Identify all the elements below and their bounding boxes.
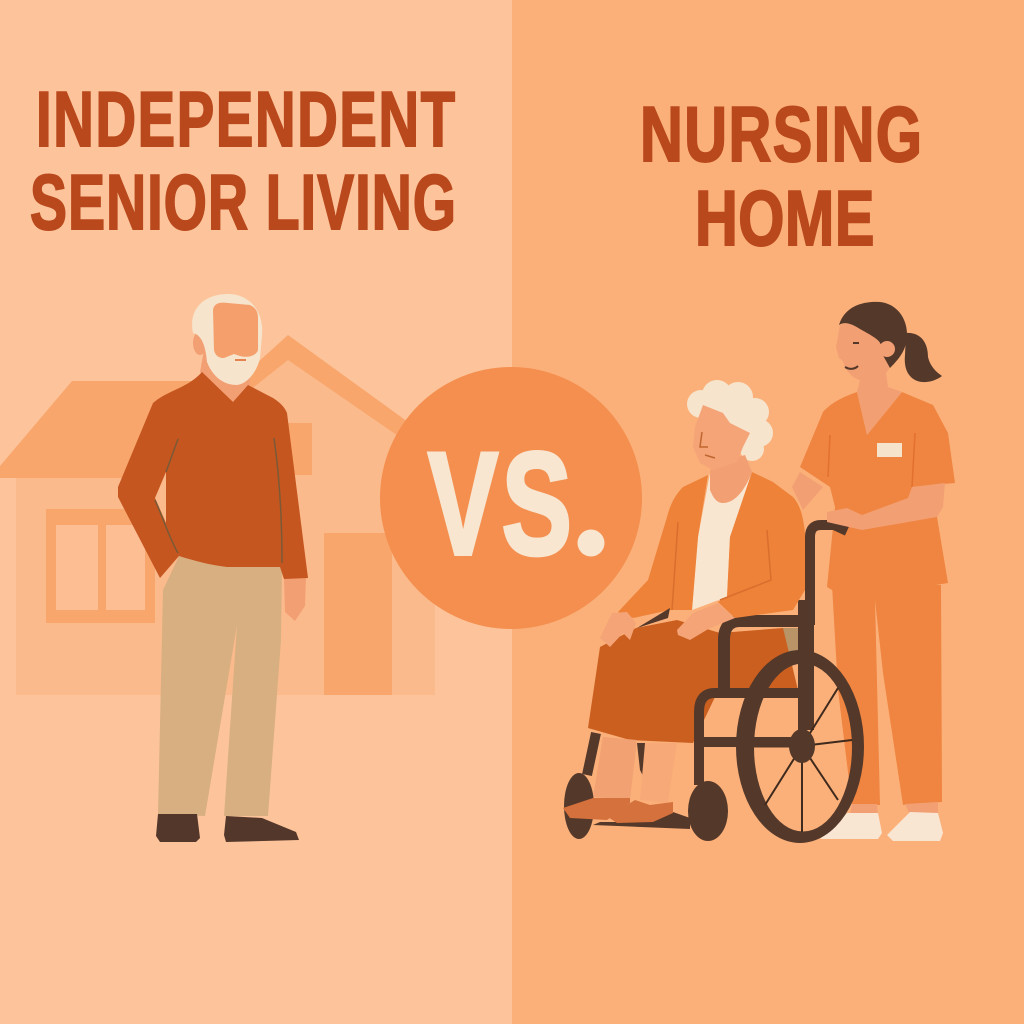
seat shadow [637, 608, 670, 628]
rear small wheel [564, 773, 594, 839]
arm gap [155, 472, 166, 523]
heading: independent senior living [30, 76, 456, 246]
nurse ponytail [905, 333, 942, 382]
wheelchair seat back fabric [783, 628, 799, 652]
woman white hair [687, 380, 773, 461]
face [213, 303, 258, 358]
nurse hair [839, 302, 907, 368]
wheelchair post [798, 600, 814, 730]
wheelchair rear strut [587, 733, 596, 775]
nurse scrub top [800, 392, 955, 592]
illustration: elderly man [118, 294, 308, 842]
nurse forearm and hand [827, 483, 945, 530]
wheel hub [789, 729, 815, 763]
woman cardigan right [718, 472, 805, 618]
nurse face [836, 318, 892, 382]
nurse back arm [792, 472, 823, 510]
house window [46, 509, 155, 623]
shoes [156, 814, 299, 842]
nurse eye and smile [845, 343, 859, 369]
heading: nursing home: NURSING [640, 90, 922, 178]
wheel spokes [765, 688, 852, 832]
sweater [118, 372, 308, 579]
wheelchair inner strut [637, 743, 645, 780]
nurse shoes [820, 812, 943, 841]
heading: nursing home: HOME [695, 174, 874, 262]
woman face lines [700, 432, 715, 458]
nurse trousers [832, 585, 942, 805]
icon: house [0, 335, 435, 695]
wheelchair handle and rear post [810, 525, 847, 625]
heading: independent senior living: INDEPENDENT [36, 76, 455, 163]
woman hands [600, 612, 636, 647]
small front wheel [688, 781, 728, 841]
footrest [593, 812, 690, 829]
hair and beard [192, 294, 262, 385]
wheelchair frame [699, 621, 800, 785]
heading: independent senior living: SENIOR LIVING [30, 160, 456, 246]
sweater seams [155, 438, 282, 563]
nurse ankles [850, 802, 938, 815]
wheel axle bar [754, 738, 800, 748]
heading: nursing home [640, 90, 922, 262]
ear [193, 331, 207, 355]
woman cardigan left [618, 475, 708, 618]
badge [877, 443, 902, 457]
vs text: VS. [428, 422, 608, 585]
cardigan seams [672, 522, 771, 610]
nurse scrub seams [828, 433, 915, 487]
nurse neck [857, 367, 902, 435]
vs round dot [578, 530, 604, 556]
nurse ear [879, 341, 895, 357]
panel: independent senior living background [0, 0, 512, 1024]
big wheel [736, 650, 864, 843]
panel: nursing home background [512, 0, 1024, 1024]
woman legs [593, 737, 637, 800]
woman face [693, 405, 750, 470]
vs circle [380, 367, 642, 629]
illustration: wheelchair with elderly woman [563, 380, 945, 843]
woman shoes [563, 798, 630, 820]
hand [284, 577, 306, 621]
woman skirt [588, 620, 798, 743]
illustration: nurse [792, 302, 955, 841]
woman neck [710, 455, 752, 503]
mouth [235, 359, 246, 361]
neck [200, 350, 250, 404]
house door [324, 533, 392, 695]
woman blouse [692, 472, 752, 610]
trousers [158, 556, 282, 816]
